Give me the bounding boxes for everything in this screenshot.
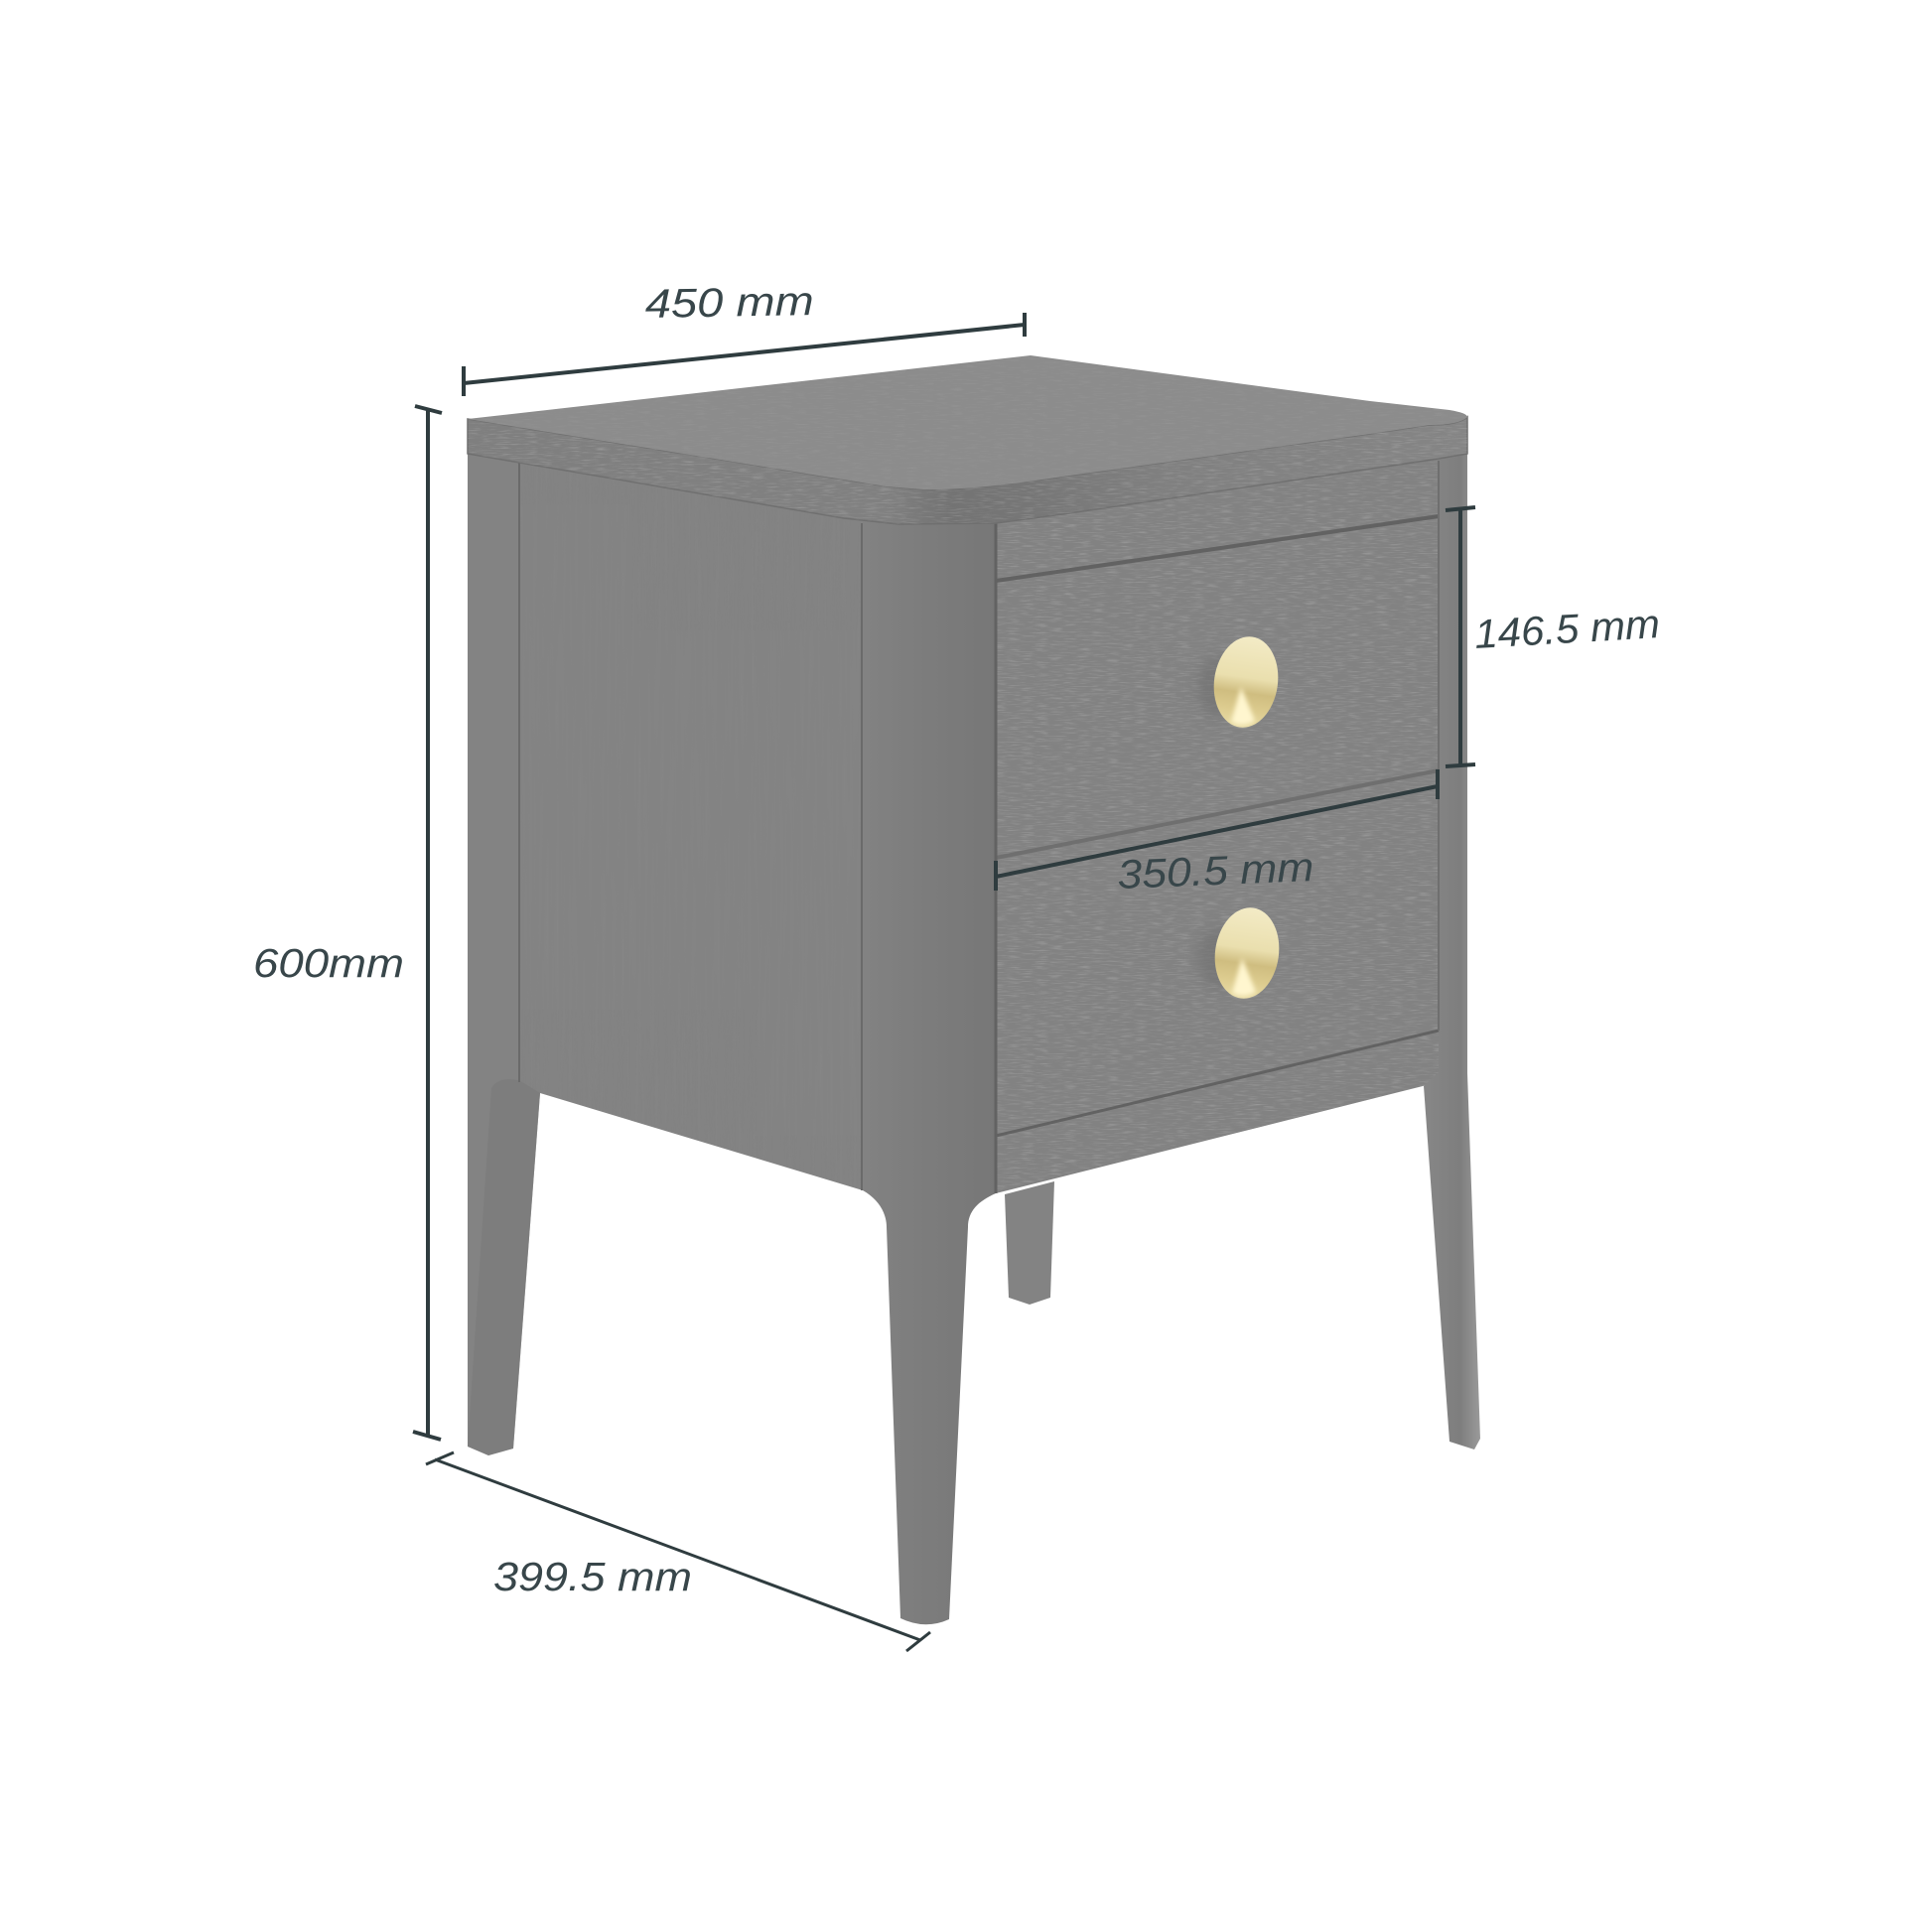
dimension: depth 399.5 mm	[426, 1452, 930, 1651]
nightstand	[468, 355, 1480, 1624]
tabletop edge grain	[468, 417, 1467, 526]
tabletop surface	[468, 355, 1467, 489]
side panel with rear leg	[468, 447, 863, 1455]
rear leg shading	[468, 1079, 540, 1455]
dimension: height 600mm	[253, 406, 442, 1440]
dimension: depth 399.5 mm: 399.5 mm	[493, 1554, 692, 1599]
dimension: drawer height 146.5 mm	[1446, 507, 1661, 766]
dimension: width 450 mm	[464, 278, 1025, 396]
dimension: width 450 mm: 450 mm	[644, 278, 814, 327]
dimension: drawer width 350.5 mm: 350.5 mm	[1117, 844, 1314, 897]
side panel grain	[519, 463, 863, 1192]
dimension: drawer height 146.5 mm: 146.5 mm	[1473, 601, 1661, 657]
back leg	[1005, 1181, 1054, 1305]
right leg	[1424, 447, 1480, 1449]
tabletop grain	[468, 355, 1467, 490]
drawer gap lines	[996, 461, 1439, 1193]
tabletop edge	[468, 417, 1467, 524]
knob lower	[1198, 903, 1285, 1003]
panel seam lines	[519, 463, 862, 1190]
knob upper	[1197, 632, 1284, 732]
front corner leg	[863, 511, 996, 1624]
dimension: drawer width 350.5 mm	[996, 769, 1438, 897]
drawer front panel	[996, 452, 1439, 1193]
drawer grain	[996, 459, 1439, 1195]
dimension: height 600mm: 600mm	[253, 940, 404, 986]
